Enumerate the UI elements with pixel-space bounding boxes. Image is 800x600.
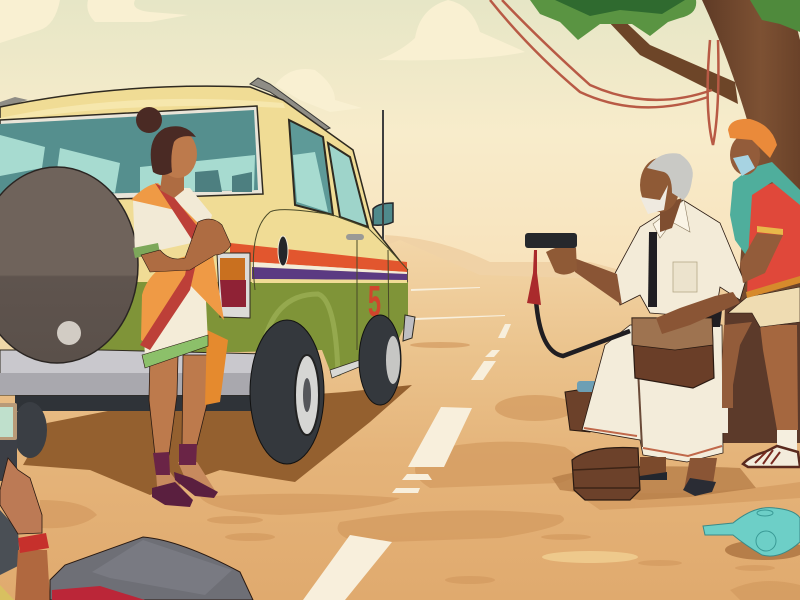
raised arm [574,258,622,305]
sleeve stripe [757,226,783,235]
upper body [0,86,407,290]
side window rear [328,143,368,227]
phone frame [0,403,17,440]
right sandal [683,478,716,496]
hand [0,458,42,534]
standing man [722,119,800,467]
leaves dark [555,0,685,16]
forearm and hand [656,292,740,334]
green hem [142,335,208,368]
head [159,130,197,178]
cream lower stripe [252,279,407,283]
cream stripe [252,262,407,274]
pocket [673,262,697,292]
hand [546,247,577,275]
orange stripe [230,243,407,272]
wheel arch [262,294,338,376]
purple stripe [252,267,407,280]
tree [530,0,800,443]
front wheel [359,315,401,405]
black strap [648,232,657,307]
dhoti fold [637,350,642,447]
side window front [289,120,333,215]
case red panel [52,586,145,600]
phone screen [0,407,13,437]
tail light [217,253,250,318]
dark sleeve [0,510,20,575]
left rear wheel [13,402,47,458]
antenna [382,110,384,240]
lower body [95,282,408,376]
hair bun [136,107,162,133]
car shadow [23,385,412,495]
red saree border [140,183,202,350]
saree body [141,250,224,345]
window panes [0,135,255,193]
under car [15,393,255,411]
road markings [303,287,511,600]
feet [156,472,192,502]
shoe stripes [755,450,780,464]
sill strip [330,351,386,378]
distant hills [385,235,620,300]
left sock [722,408,728,433]
lower trunk shadow [722,300,800,443]
white beard [640,185,668,214]
neck [160,168,184,198]
spare tire [0,167,138,363]
tire hub [57,321,81,345]
ankle wraps [153,452,170,475]
legs [149,355,178,455]
window frame [0,106,263,200]
car [0,78,415,464]
right foot [684,458,717,495]
blue object [703,508,800,560]
shirt [613,200,745,318]
mask [733,155,755,176]
object shadow [725,540,800,560]
white skirt [143,280,208,362]
neck [660,198,682,232]
wing mirror [373,203,393,225]
yellow sleeve corner [0,585,14,600]
bag belt [687,310,722,327]
leaves right [750,0,800,32]
red ropes [490,0,718,145]
satchel flap [632,318,713,350]
fuel cap [278,236,288,266]
pale sand patch [542,551,638,563]
saree shoulder [131,183,205,240]
number five: 5 [368,277,381,326]
leaves left [530,0,696,40]
arm [740,233,783,283]
forearm [15,550,50,600]
satchel [632,318,714,388]
clouds [0,0,525,112]
rear wheel [250,320,324,464]
object body [703,508,800,556]
right leg [760,325,798,430]
door seams [253,210,408,350]
wristband [18,533,49,553]
left foot [640,457,666,480]
gold hem [746,276,800,298]
red shirt [747,182,800,297]
case top panel [92,540,232,595]
back basket [565,388,600,432]
trunk [702,0,800,443]
sandals [152,482,193,507]
binoculars [525,233,577,248]
basket bands [573,467,640,488]
front basket [572,448,640,500]
dhoti [582,325,723,462]
shoe [743,446,800,467]
shorts [728,287,800,327]
seated man [525,153,756,500]
scarf [730,162,800,258]
left sandal [640,472,667,480]
face [730,135,760,175]
door handle [346,234,364,240]
sandy ground [0,240,800,600]
ground shadow [552,466,756,500]
blouse hem [133,243,160,258]
roof highlight band [0,99,285,122]
head [640,158,680,212]
phone and hand foreground [0,403,50,600]
orange tail drape [205,330,228,405]
strap [536,300,630,356]
tassel [527,250,541,305]
phone [0,403,17,481]
dhoti hem [584,428,722,456]
front bumper [403,315,415,341]
collar [653,200,690,238]
grey case foreground [50,537,253,600]
arm and hands [141,219,231,272]
hair [151,126,196,175]
ground patches [40,342,800,600]
turban [728,119,777,158]
rear window [0,110,258,196]
seats [195,170,252,192]
blouse [133,188,212,255]
grey hair [647,153,693,200]
woman [131,107,231,507]
sky [0,0,800,300]
sock [777,430,797,454]
rear bumper [0,350,276,395]
branch [605,12,738,104]
roof rack [250,78,330,130]
blue cloth [577,381,597,392]
left leg [722,322,752,408]
